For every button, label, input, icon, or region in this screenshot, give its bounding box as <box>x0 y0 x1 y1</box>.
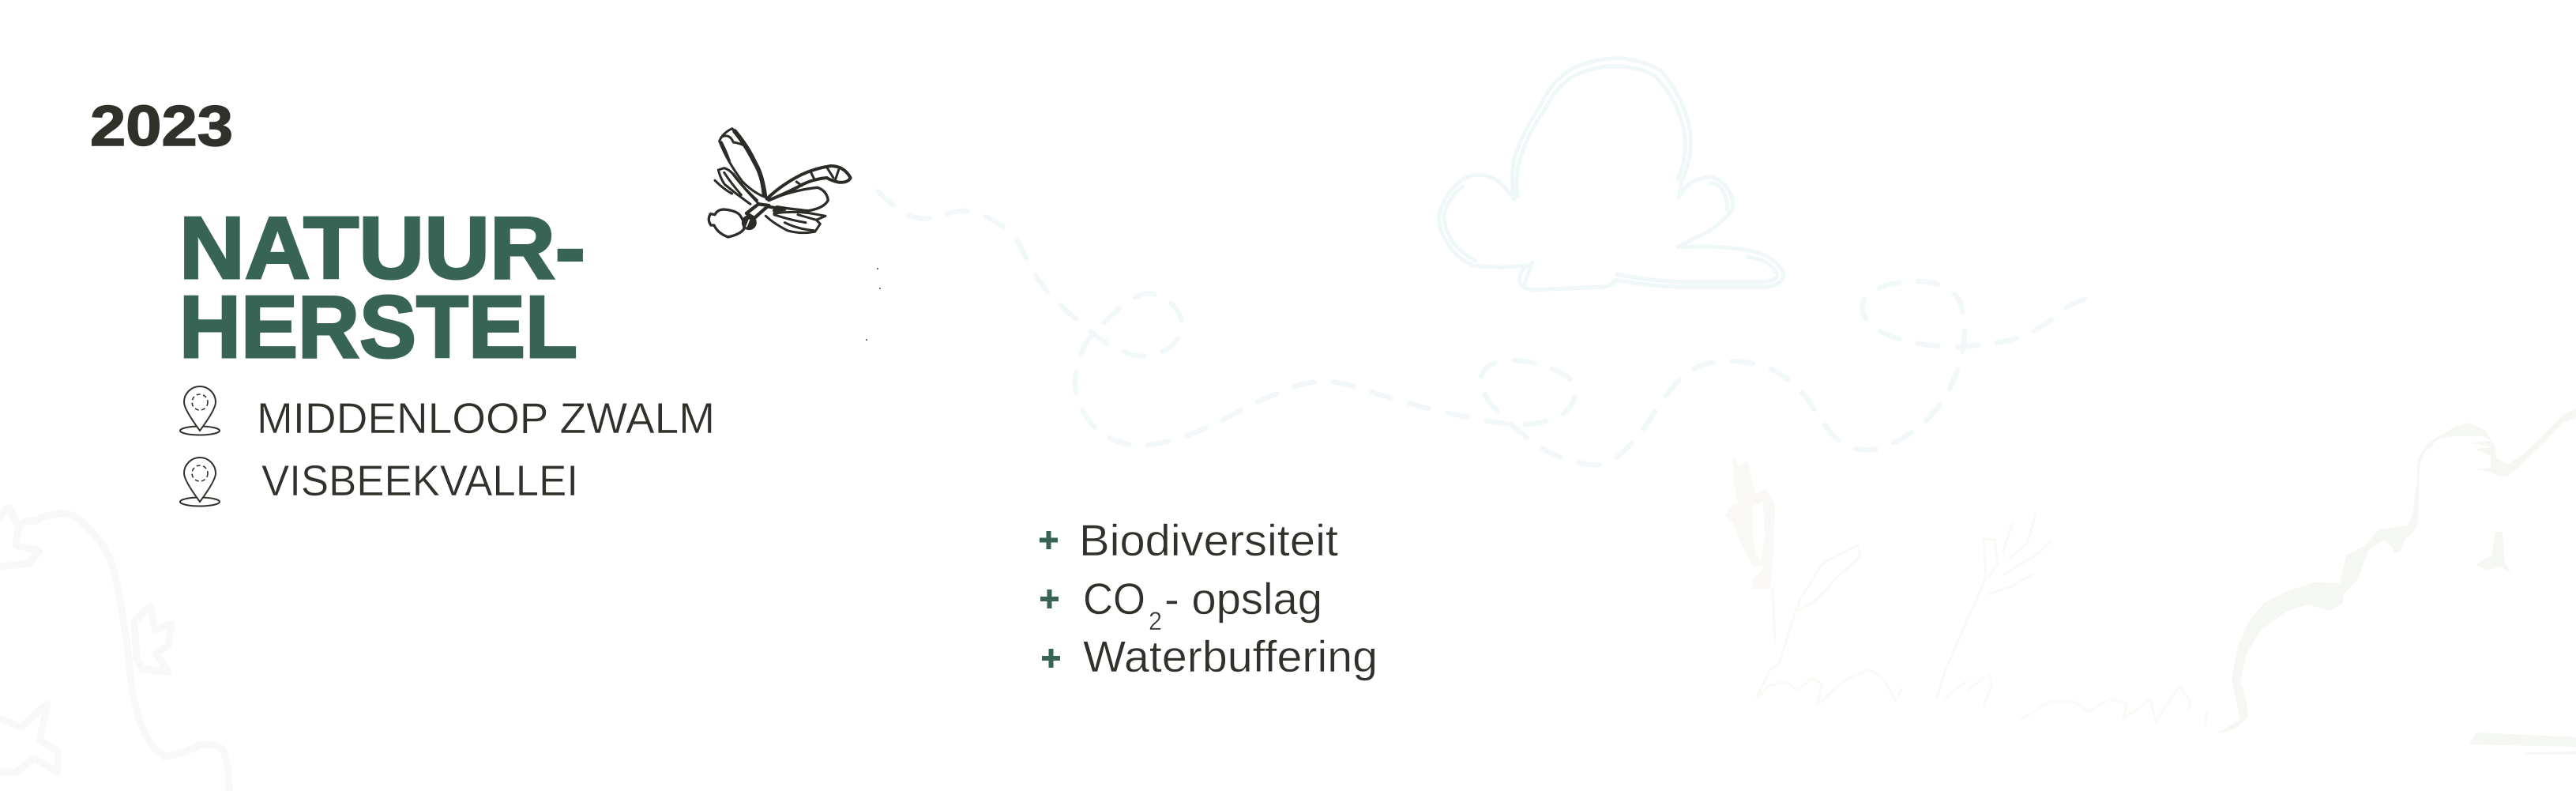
benefits list <box>1040 515 1378 681</box>
icon: plus <box>1042 649 1060 668</box>
location name: VISBEEKVALLEI <box>261 456 578 505</box>
plant: tall frond <box>1725 457 1775 589</box>
title line 1: NATUUR- <box>179 199 585 297</box>
benefit: biodiversiteit: Biodiversiteit <box>1079 515 1338 565</box>
plant: stems, leaves and grass <box>1757 515 2207 725</box>
title <box>179 199 585 376</box>
decoration: small specks near the dragonfly <box>866 268 881 341</box>
decoration: faint plant at bottom left <box>0 507 229 790</box>
location: Middenloop Zwalm <box>180 386 715 443</box>
benefit: CO2-opslag: - opslag <box>1164 574 1322 623</box>
decoration: faint hill contour at bottom right <box>2217 409 2576 755</box>
title line 2: HERSTEL <box>179 278 577 376</box>
decoration: faint grass and plants <box>1725 457 2207 725</box>
year label: 2023 <box>90 95 233 158</box>
icon: map pin <box>180 386 220 435</box>
icon: plus <box>1040 589 1059 608</box>
benefit: CO2-opslag <box>1040 574 1322 635</box>
icon: dragonfly <box>709 129 851 237</box>
benefit: CO2-opslag: CO <box>1083 574 1145 623</box>
location: Visbeekvallei <box>180 456 578 506</box>
benefit: waterbuffering: Waterbuffering <box>1083 631 1378 681</box>
icon: map pin <box>180 458 220 506</box>
icon: plus <box>1040 531 1058 549</box>
benefit: CO2-opslag: 2 <box>1149 607 1162 635</box>
decoration: faint sketched cloud <box>1439 58 1784 290</box>
location name: MIDDENLOOP ZWALM <box>257 394 715 443</box>
decoration: dashed flight path of the dragonfly <box>878 191 2096 465</box>
